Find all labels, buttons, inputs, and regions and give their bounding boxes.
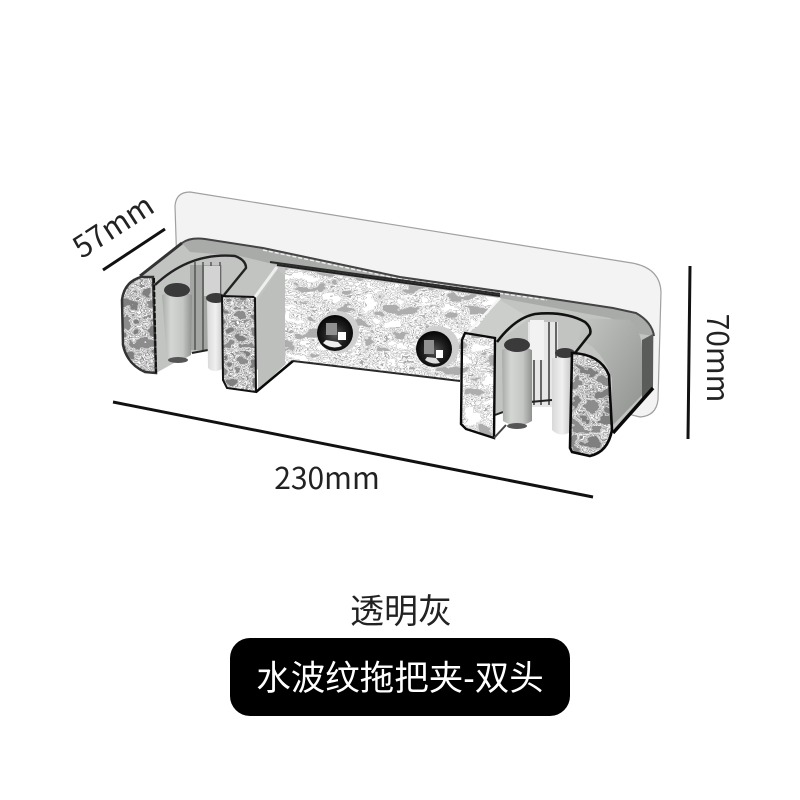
left translucent wing [258, 270, 290, 390]
rear top band [182, 238, 654, 336]
left outer pad [120, 276, 158, 374]
height dimension line [688, 266, 690, 439]
lower lip [192, 350, 552, 415]
depth label 57mm: 57mm [63, 182, 161, 267]
left wire arc [155, 256, 246, 295]
depth dimension line [103, 229, 165, 270]
product name pill: 水波纹拖把夹-双头 [256, 660, 544, 698]
height label 70mm: 70mm [698, 314, 742, 402]
right interior [528, 322, 558, 407]
right rollers [502, 338, 575, 435]
right wall [578, 318, 642, 426]
chrome screw left [317, 311, 359, 353]
colour caption: 透明灰 [350, 593, 452, 631]
clip rear body [140, 238, 654, 433]
product name pill [230, 638, 570, 716]
chrome screw right [416, 326, 459, 368]
product: transparent grey double mop clip [118, 192, 661, 460]
left rollers [162, 283, 226, 371]
right front clip [458, 330, 506, 442]
centre wall plate with water ripple texture [255, 262, 506, 396]
adhesive backing plate [175, 192, 661, 417]
left front clip [221, 295, 257, 394]
right wire arc [497, 313, 590, 353]
infographic canvas [72, 191, 730, 716]
right outer pad [568, 352, 614, 458]
left interior [190, 265, 222, 350]
length label 230mm: 230mm [274, 454, 380, 498]
right translucent wing [462, 300, 530, 340]
length dimension line [113, 402, 593, 497]
